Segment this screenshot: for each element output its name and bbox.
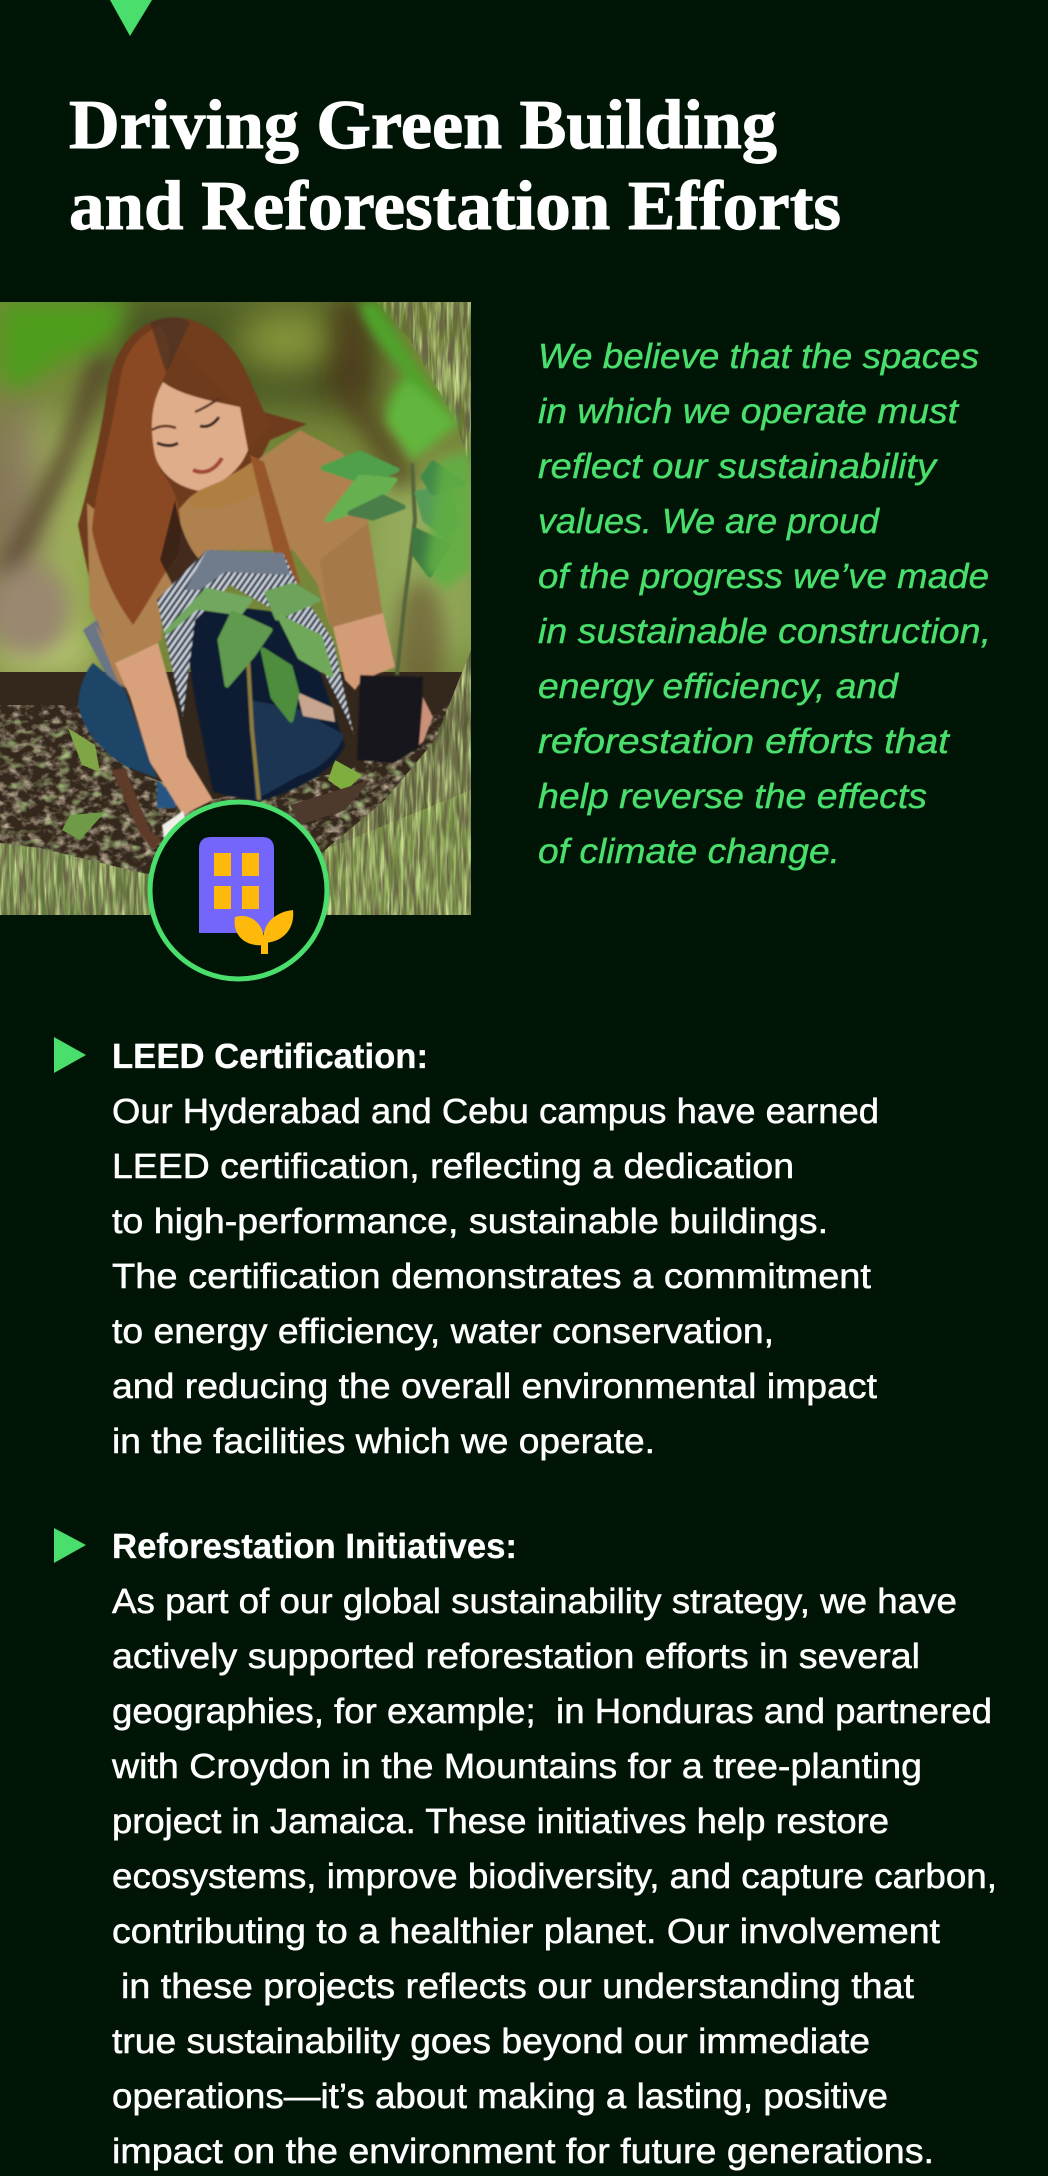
quote text: help reverse the effects	[538, 777, 927, 816]
text block: LEED body: to high-performance, sustainable buildings.	[112, 1202, 828, 1241]
hair front	[92, 325, 181, 625]
ground	[0, 672, 471, 915]
left arm	[115, 643, 213, 815]
sapling: right	[323, 453, 463, 675]
quote text: reforestation efforts that	[538, 722, 950, 761]
quote text: of climate change.	[538, 832, 840, 871]
heading: LEED Certification: LEED Certification:	[112, 1037, 428, 1076]
sweater	[87, 430, 383, 663]
white shoe	[161, 810, 186, 840]
text block: reforestation body: project in Jamaica. These initiatives help restore	[112, 1802, 889, 1841]
apron	[157, 550, 354, 735]
section: LEED Certification	[54, 1037, 879, 1461]
quote text: reflect our sustainability	[538, 447, 939, 486]
text block: reforestation body	[111, 1582, 997, 2171]
quote text: of the progress we’ve made	[538, 557, 989, 596]
section: Reforestation Initiatives	[54, 1527, 997, 2171]
quote text: energy efficiency, and	[538, 667, 900, 706]
text block: reforestation body: in these projects reflects our understanding that	[121, 1967, 914, 2006]
quote text: We believe that the spaces	[538, 337, 979, 376]
quote text: values. We are proud	[538, 502, 881, 541]
text block: LEED body: Our Hyderabad and Cebu campus have earned	[112, 1092, 879, 1131]
quote text	[538, 337, 991, 871]
text block: LEED body: in the facilities which we operate.	[112, 1422, 655, 1461]
title	[69, 87, 841, 245]
jeans	[78, 663, 157, 778]
apron strap	[250, 455, 300, 590]
arrow: bullet	[54, 1037, 86, 1073]
ripped knee	[297, 692, 335, 722]
text block: LEED body: The certification demonstrates a commitment	[112, 1257, 871, 1296]
icon: green building badge	[150, 802, 327, 979]
quote text: in sustainable construction,	[538, 612, 991, 651]
text block: reforestation body: contributing to a healthier planet. Our involvement	[112, 1912, 940, 1951]
text block: reforestation body: true sustainability goes beyond our immediate	[112, 2022, 870, 2061]
title: Driving Green Building	[69, 87, 777, 164]
text block: LEED body: LEED certification, reflecting a dedication	[112, 1147, 794, 1186]
face	[152, 382, 248, 491]
text block: reforestation body: geographies, for example; in Honduras and partnered	[112, 1692, 992, 1731]
text block: reforestation body: with Croydon in the Mountains for a tree-planting	[111, 1747, 922, 1786]
dark trousers	[180, 600, 345, 802]
arrow: bullet	[54, 1528, 86, 1563]
sapling: centre	[167, 585, 331, 800]
text block: LEED body: and reducing the overall environmental impact	[112, 1367, 877, 1406]
text block: reforestation body: impact on the environment for future generations.	[112, 2132, 934, 2171]
text block: reforestation body: As part of our global sustainability strategy, we have	[112, 1582, 957, 1621]
heading: Reforestation Initiatives: Reforestation Initiatives:	[112, 1527, 517, 1566]
text block: reforestation body: ecosystems, improve biodiversity, and capture carbon,	[112, 1857, 997, 1896]
icon: building	[199, 837, 274, 933]
woman	[78, 317, 463, 850]
photo: woman planting a sapling	[0, 290, 480, 915]
text block: reforestation body: operations—it’s about making a lasting, positive	[112, 2077, 888, 2116]
text block: LEED body	[112, 1092, 879, 1461]
title: and Reforestation Efforts	[69, 168, 841, 245]
text block: reforestation body: actively supported reforestation efforts in several	[112, 1637, 920, 1676]
right arm	[333, 613, 395, 690]
streak texture	[0, 302, 471, 915]
icon: sprout	[235, 910, 293, 954]
garden trowel	[112, 768, 162, 850]
badge circle	[150, 802, 327, 979]
arrow: top pointer	[110, 0, 152, 36]
black seedling pot	[357, 675, 423, 763]
blurred foreground leaves	[358, 302, 471, 590]
quote text: in which we operate must	[538, 392, 959, 431]
text block: LEED body: to energy efficiency, water conservation,	[112, 1312, 774, 1351]
hair back	[77, 318, 307, 576]
